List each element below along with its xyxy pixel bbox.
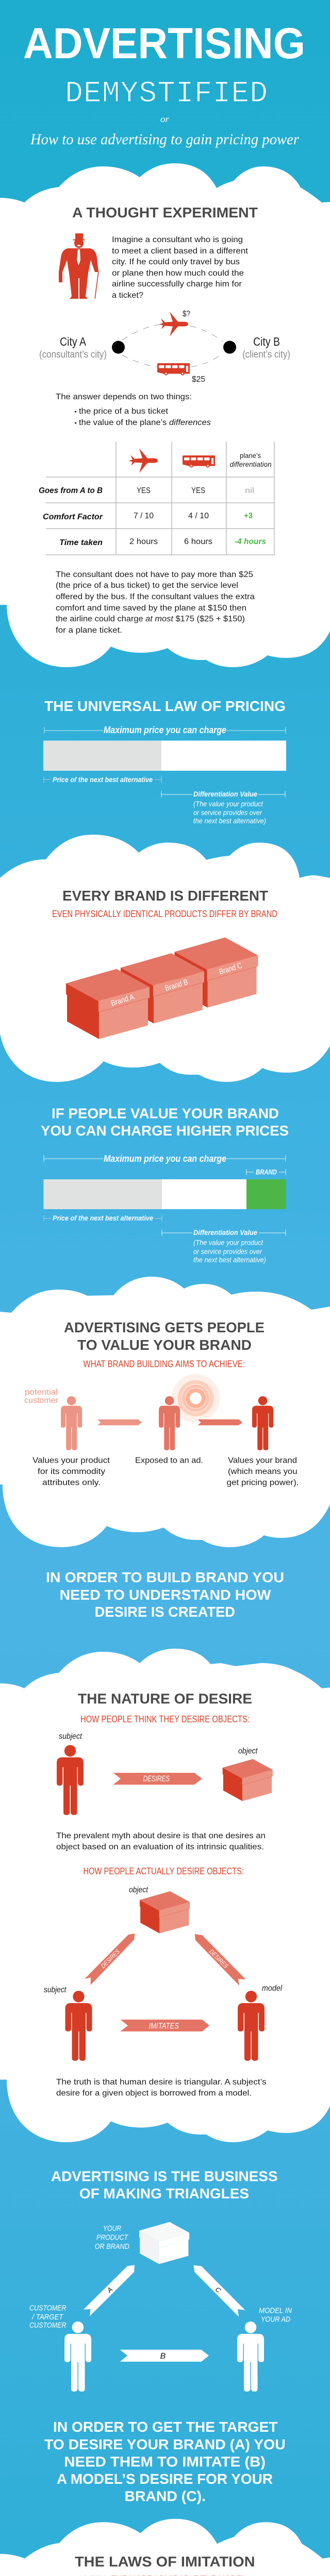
- panel: charge higher prices: [41, 1106, 289, 1264]
- intro text: airline successfully charge him for: [112, 280, 242, 289]
- answer text: [56, 393, 211, 427]
- differentiation value: Differentiation Value: [193, 790, 257, 798]
- subheading: EVEN PHYSICALLY IDENTICAL PRODUCTS DIFFER BY BRAND: [52, 909, 277, 919]
- cloud: [0, 163, 330, 667]
- text: myth: The prevalent myth about desire is that one desires an: [56, 1832, 266, 1840]
- route diagram: (consultant’s city): [39, 349, 107, 360]
- differentiation value: the next best alternative): [193, 1256, 266, 1264]
- comparison table: plane’s: [240, 451, 261, 460]
- comparison table: differentiation: [230, 460, 272, 468]
- heading: OF MAKING TRIANGLES: [79, 2185, 249, 2201]
- label: product or brand: PRODUCT: [96, 2233, 129, 2242]
- cloud: [0, 1649, 330, 2142]
- label: product or brand: OR BRAND: [95, 2242, 129, 2251]
- text: myth: object based on an evaluation of its intrinsic qualities.: [56, 1843, 264, 1852]
- caption: exposed: Exposed to an ad.: [135, 1456, 203, 1465]
- next best alternative: Price of the next best alternative: [53, 1214, 153, 1222]
- differentiation value: or service provides over: [193, 1247, 262, 1256]
- heading: IF PEOPLE VALUE YOUR BRAND: [52, 1106, 279, 1121]
- diagram: triangle: object: [129, 1886, 148, 1894]
- cloud: [0, 1277, 330, 1547]
- heading: [51, 2168, 278, 2201]
- heading: YOU CAN CHARGE HIGHER PRICES: [41, 1123, 289, 1139]
- comparison table: nil: [245, 486, 254, 495]
- heading: [64, 1319, 265, 1353]
- conclusion text: offered by the bus. If the consultant values the extra: [56, 592, 255, 601]
- caption: before: attributes only.: [42, 1479, 101, 1487]
- subheading: HOW PEOPLE ACTUALLY DESIRE OBJECTS:: [84, 1866, 244, 1876]
- conclusion text: (the price of a bus ticket) to get the service level: [56, 581, 238, 590]
- label: product or brand: [95, 2224, 129, 2251]
- text: truth: desire for a given object is borrowed from a model.: [56, 2089, 252, 2098]
- caption: after: Values your brand: [228, 1456, 297, 1465]
- text: myth: [56, 1832, 266, 1852]
- label: product or brand: YOUR: [103, 2224, 121, 2233]
- route diagram: $25: [192, 375, 205, 384]
- icon: plane: [159, 312, 188, 336]
- potential customer label: customer: [24, 1396, 59, 1405]
- heading: how desire is created: DESIRE IS CREATED: [95, 1604, 235, 1620]
- intro text: city. If he could only travel by bus: [112, 258, 240, 266]
- heading: A THOUGHT EXPERIMENT: [72, 205, 258, 221]
- arrow: [198, 1419, 242, 1425]
- brand boxes: Brand C: [218, 961, 243, 976]
- diagram: triangle: subject: [44, 1986, 67, 1994]
- label: customer: [29, 2304, 67, 2330]
- brand measure: BRAND: [256, 1167, 277, 1176]
- diagram: myth: [57, 1732, 273, 1815]
- route diagram: (client’s city): [242, 349, 290, 360]
- answer text: the value of the plane’s differences: [79, 418, 211, 427]
- cloud: [0, 835, 330, 1082]
- arrow B: [120, 2350, 209, 2362]
- conclusion text: the airline could charge at most $175 ($25 + $150): [56, 615, 245, 623]
- comparison table: +3: [244, 512, 253, 520]
- heading: [41, 1106, 289, 1139]
- differentiation value: or service provides over: [193, 808, 262, 817]
- brand boxes: Brand A: [110, 993, 135, 1008]
- person: after: [252, 1396, 273, 1450]
- comparison table: 6 hours: [184, 537, 212, 546]
- arrow A: [84, 2265, 135, 2316]
- label: model: MODEL IN: [259, 2306, 292, 2315]
- heading: ADVERTISING IS THE BUSINESS: [51, 2168, 278, 2184]
- heading: THE LAWS OF IMITATION: [75, 2554, 255, 2570]
- comparison table: 4 / 10: [188, 512, 209, 520]
- intro text: Imagine a consultant who is going: [112, 235, 243, 244]
- panel: making triangles: [29, 2168, 292, 2504]
- subtitle: How to use advertising to gain pricing power: [30, 131, 299, 148]
- panel: the laws of imitation: [0, 2519, 330, 2576]
- heading: ADVERTISING GETS PEOPLE: [64, 1319, 265, 1335]
- max price measure: Maximum price you can charge: [104, 725, 226, 735]
- brand boxes: Brand B: [164, 978, 189, 993]
- arrow C: [193, 2265, 245, 2317]
- title: demystified: DEMYSTIFIED: [65, 77, 268, 111]
- differentiation value: Differentiation Value: [193, 1228, 257, 1236]
- heading: how desire is created: IN ORDER TO BUILD BRAND YOU: [46, 1569, 284, 1585]
- title block: [23, 19, 305, 148]
- route diagram: City B: [253, 335, 280, 348]
- comparison table: YES: [191, 486, 205, 495]
- cloud: [0, 2519, 330, 2576]
- caption: after: [227, 1456, 299, 1487]
- diagram: triangle: model: [262, 1984, 282, 1993]
- comparison table: 2 hours: [129, 537, 158, 546]
- panel: a thought experiment: [0, 163, 330, 667]
- price bar: [43, 1179, 286, 1209]
- answer text: the price of a bus ticket: [79, 407, 169, 416]
- caption: before: for its commodity: [38, 1467, 105, 1476]
- route diagram: [39, 310, 290, 384]
- or: or: [160, 114, 170, 124]
- heading: EVERY BRAND IS DIFFERENT: [62, 888, 268, 904]
- panel: every brand is different: [0, 835, 330, 1082]
- brand boxes: [66, 938, 258, 1039]
- heading: how desire is created: [46, 1569, 284, 1620]
- panel: universal law of pricing: [43, 698, 286, 825]
- brand measure: [246, 1167, 286, 1176]
- answer text: The answer depends on two things:: [56, 393, 192, 401]
- diagram: triangle: [44, 1886, 282, 2061]
- differentiation value: the next best alternative): [193, 817, 266, 825]
- conclusion heading: [44, 2419, 286, 2504]
- text: truth: [56, 2078, 267, 2098]
- caption: after: get pricing power).: [227, 1479, 299, 1487]
- conclusion heading: NEED THEM TO IMITATE (B): [64, 2454, 266, 2470]
- arrow B: B: [160, 2352, 166, 2361]
- conclusion text: comfort and time saved by the plane at $150 then: [56, 604, 246, 613]
- caption: before: Values your product: [32, 1456, 110, 1465]
- max price measure: [44, 725, 286, 735]
- comparison table: Comfort Factor: [43, 513, 103, 521]
- conclusion heading: TO DESIRE YOUR BRAND (A) YOU: [44, 2436, 286, 2452]
- intro text: a ticket?: [112, 291, 143, 300]
- potential customer label: potential: [25, 1388, 58, 1397]
- heading: THE UNIVERSAL LAW OF PRICING: [44, 698, 286, 714]
- conclusion heading: A MODEL’S DESIRE FOR YOUR: [57, 2471, 273, 2487]
- subheading: WHAT BRAND BUILDING AIMS TO ACHIEVE:: [84, 1359, 245, 1369]
- differentiation value: [162, 1228, 286, 1264]
- diagram: triangle: IMITATES: [148, 2022, 179, 2030]
- conclusion text: The consultant does not have to pay more than $25: [56, 570, 253, 579]
- icon: table bus: [183, 455, 215, 468]
- diagram: triangle: DESIRES: [100, 1947, 122, 1970]
- diagram: myth: subject: [59, 1732, 82, 1741]
- conclusion heading: IN ORDER TO GET THE TARGET: [53, 2419, 278, 2435]
- arrow: [97, 1419, 142, 1425]
- icon: table plane: [129, 448, 158, 473]
- person: customer: [64, 2321, 91, 2392]
- price bar: [43, 741, 286, 771]
- label: customer: / TARGET: [32, 2313, 64, 2321]
- max price measure: Maximum price you can charge: [104, 1154, 226, 1164]
- heading: how desire is created: NEED TO UNDERSTAND HOW: [60, 1587, 271, 1603]
- heading: TO VALUE YOUR BRAND: [77, 1337, 252, 1353]
- intro text: or plane then how much could the: [112, 269, 244, 278]
- comparison table: -4 hours: [235, 537, 266, 546]
- conclusion text: for a plane ticket.: [56, 626, 122, 635]
- caption: before: [32, 1456, 110, 1487]
- panel: the nature of desire: [0, 1649, 330, 2142]
- subheading: HOW PEOPLE THINK THEY DESIRE OBJECTS:: [80, 1714, 250, 1724]
- comparison table: YES: [137, 486, 151, 495]
- icon: consultant: [59, 233, 98, 299]
- intro text: [112, 235, 249, 300]
- intro text: to meet a client based in a different: [112, 247, 249, 256]
- conclusion text: [56, 570, 255, 635]
- diagram: myth: DESIRES: [143, 1775, 170, 1784]
- panel: advertising gets people to value your brand: [0, 1277, 330, 1547]
- max price measure: [44, 1154, 286, 1164]
- conclusion heading: BRAND (C).: [125, 2488, 206, 2504]
- person: before: [61, 1396, 82, 1450]
- differentiation value: [161, 790, 285, 825]
- arrow A: A: [105, 2285, 114, 2295]
- label: model: [259, 2306, 292, 2324]
- text: truth: The truth is that human desire is triangular. A subject’s: [56, 2078, 267, 2087]
- comparison table: 7 / 10: [134, 512, 154, 520]
- icon: ad signal rings: [171, 1374, 220, 1422]
- label: model: YOUR AD: [261, 2315, 290, 2324]
- comparison table: Time taken: [59, 538, 103, 547]
- title: advertising: ADVERTISING: [23, 19, 305, 67]
- label: customer: CUSTOMER: [29, 2321, 67, 2330]
- person: exposed: [159, 1396, 180, 1450]
- next best alternative: Price of the next best alternative: [53, 775, 153, 784]
- heading: THE NATURE OF DESIRE: [78, 1691, 252, 1706]
- person: model: [237, 2321, 264, 2392]
- arrow C: C: [214, 2285, 223, 2295]
- comparison table: Goes from A to B: [39, 486, 103, 495]
- caption: after: (which means you: [228, 1467, 297, 1476]
- diagram: triangle: DESIRES: [208, 1948, 230, 1970]
- diagram: myth: object: [238, 1747, 258, 1756]
- differentiation value: (The value your product: [193, 800, 263, 808]
- comparison table: [39, 442, 274, 555]
- label: customer: CUSTOMER: [29, 2304, 67, 2313]
- differentiation value: (The value your product: [193, 1239, 263, 1247]
- route diagram: $?: [183, 310, 190, 318]
- potential customer label: [24, 1388, 59, 1405]
- icon: bus: [157, 363, 190, 376]
- route diagram: City A: [60, 335, 87, 348]
- icon: white box: [139, 2222, 189, 2264]
